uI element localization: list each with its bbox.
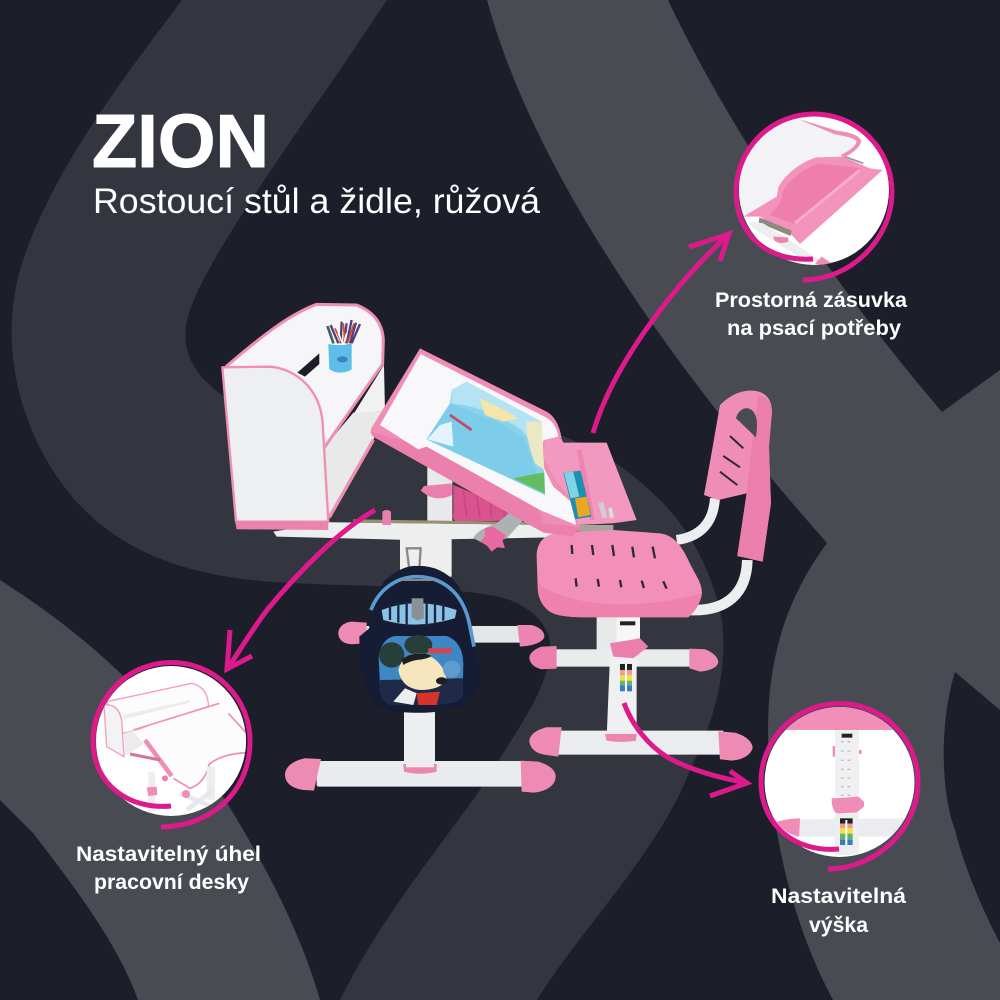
- backrest hole: [736, 408, 757, 437]
- label: drawer: Prostorná zásuvka: [715, 289, 907, 312]
- chair tubes: [677, 498, 715, 540]
- shelf back and top: [227, 304, 383, 447]
- stand: [148, 772, 155, 812]
- subtitle: Rostoucí stůl a židle, růžová: [93, 182, 541, 221]
- backpack: [359, 548, 482, 713]
- pencil cup: [327, 320, 360, 373]
- label: height: [771, 885, 906, 937]
- front foot: [317, 761, 525, 787]
- inset circle: drawer: [733, 114, 892, 280]
- chair posts: [597, 617, 640, 655]
- height sticker: [620, 664, 632, 692]
- body: [359, 566, 482, 713]
- post: [835, 730, 859, 797]
- arrow to height inset: [624, 703, 747, 796]
- rear foot of chair: [553, 649, 695, 667]
- inset circle: height: [760, 703, 920, 869]
- pencil box: [563, 471, 592, 519]
- bottom pink strip: [235, 521, 328, 530]
- slot: [297, 353, 319, 377]
- seat: [786, 707, 894, 730]
- stripes: [382, 598, 457, 625]
- label: desk angle: Nastavitelný úhel: [76, 843, 261, 866]
- label: desk angle: pracovní desky: [94, 871, 249, 894]
- lower compartment: [325, 411, 385, 520]
- pink frame: [371, 348, 580, 537]
- front pocket: [379, 636, 463, 705]
- arrow to desk angle inset: [227, 510, 375, 669]
- desk surface: [733, 118, 859, 218]
- desk beam and mechanism: [273, 485, 613, 552]
- label: height: výška: [809, 914, 868, 937]
- hook: [407, 548, 421, 569]
- rear foot bar: [353, 626, 530, 643]
- label: drawer: na psací potřeby: [727, 317, 901, 340]
- label: desk angle: [76, 843, 261, 894]
- upper desk post: [427, 463, 452, 523]
- side panel: [222, 367, 328, 522]
- legs: [748, 222, 820, 263]
- title: ZION: [92, 99, 269, 183]
- book: [427, 382, 545, 495]
- sticker: [840, 818, 853, 845]
- desk top: [370, 348, 637, 537]
- foot: [800, 818, 907, 837]
- background: light grey ribbon bottom left: [0, 580, 320, 1000]
- backrest: [704, 391, 772, 562]
- drawer: [543, 438, 637, 525]
- hutch shelf: [222, 304, 385, 530]
- mickey: [379, 635, 460, 705]
- ring: [93, 662, 250, 827]
- arrow to drawer inset: [593, 234, 729, 433]
- front foot of chair: [557, 731, 723, 755]
- blue trim: [371, 577, 474, 647]
- background: dark grey ribbon: [12, 0, 723, 1000]
- white board: [380, 354, 576, 525]
- ring: [736, 114, 892, 280]
- label: height: Nastavitelná: [771, 885, 906, 908]
- lower desk post: [400, 537, 452, 577]
- inset circle: desk angle: [93, 662, 250, 827]
- ring: [761, 704, 918, 869]
- background: light grey ribbon right: [487, 0, 1000, 1000]
- hutch: [107, 683, 208, 733]
- collar: [832, 797, 864, 813]
- desk legs and base: [285, 463, 556, 793]
- drawer body: [743, 157, 883, 244]
- collar and front post: [607, 657, 637, 738]
- seat: [537, 530, 702, 617]
- chair: [529, 391, 772, 761]
- label: drawer: [715, 289, 907, 340]
